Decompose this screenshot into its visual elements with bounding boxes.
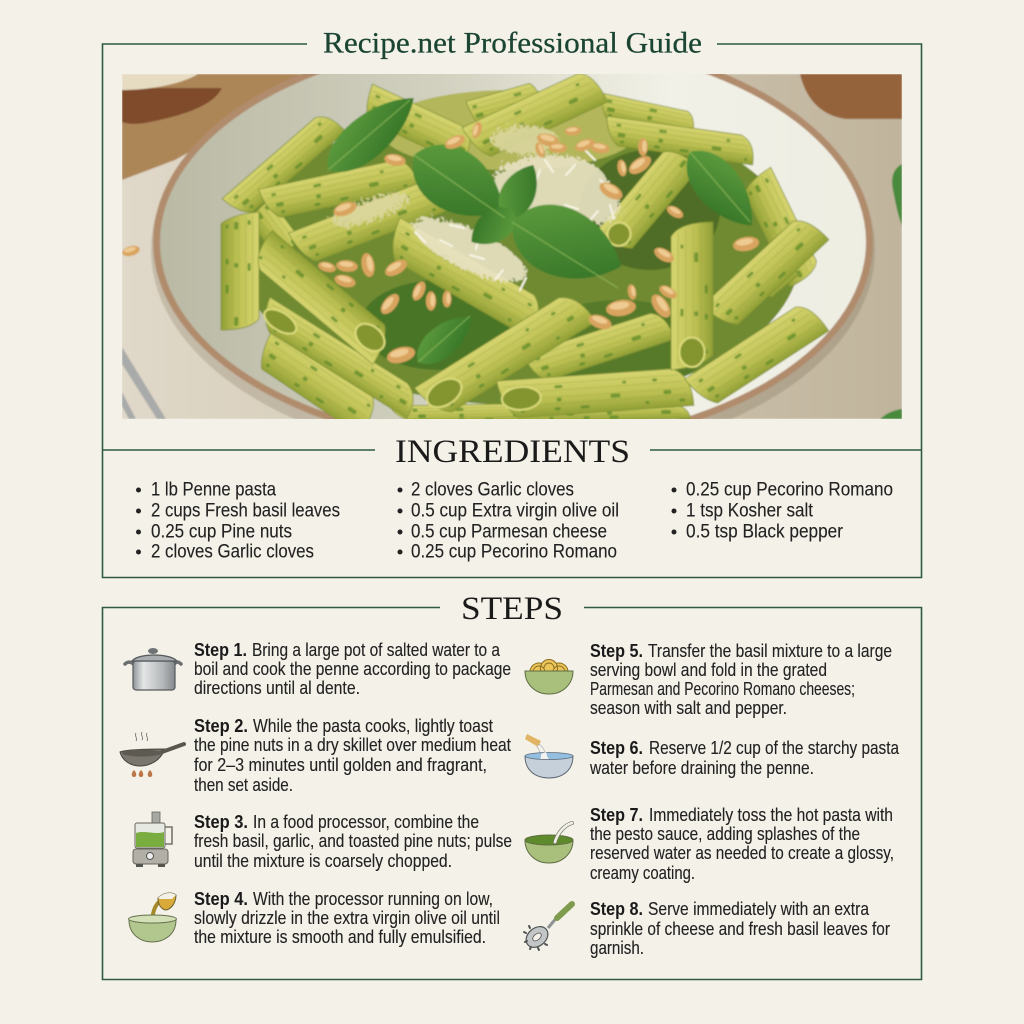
step 6: Reserve 1/2 cup of the starchy pasta: [649, 738, 900, 758]
step 1: Step 1.: [194, 639, 247, 660]
ingredients column 1: [136, 478, 340, 562]
step 3: In a food processor, combine the: [253, 812, 479, 832]
step 5: season with salt and pepper.: [590, 698, 787, 718]
bowl: [150, 74, 875, 419]
ingredients column 1: 0.25 cup Pine nuts: [151, 520, 292, 542]
step 5: [590, 640, 892, 718]
ingredients column 1: 2 cups Fresh basil leaves: [151, 500, 340, 522]
step 4: With the processor running on low,: [253, 889, 493, 909]
step 2: then set aside.: [194, 775, 293, 795]
ingredients column 2: [398, 478, 619, 562]
stray pine nut: [122, 245, 140, 257]
ingredients column 3: 0.25 cup Pecorino Romano: [686, 478, 893, 500]
step 6: Step 6.: [590, 737, 643, 758]
pine nuts: [317, 121, 760, 366]
step 2: [194, 715, 511, 795]
icon: pesto bowl with spoon: [525, 823, 573, 863]
fork: [122, 347, 166, 419]
icon: food processor: [133, 812, 172, 867]
ingredients column 1: 2 cloves Garlic cloves: [151, 540, 314, 562]
ingredients column 3: 1 tsp Kosher salt: [686, 500, 814, 522]
wood tabletop: [122, 74, 301, 180]
ingredients column 2: 2 cloves Garlic cloves: [411, 478, 574, 500]
ingredients column 3: [672, 478, 893, 542]
step 1: directions until al dente.: [194, 678, 360, 698]
step 5: Step 5.: [590, 640, 643, 661]
icon: skillet with flames: [120, 732, 184, 777]
step 6: [589, 737, 900, 778]
step 7: [590, 804, 894, 883]
step 8: [590, 898, 890, 958]
step 7: creamy coating.: [590, 863, 695, 883]
step 1: boil and cook the penne according to package: [194, 659, 511, 679]
step 1: [194, 639, 511, 698]
penne pieces: [221, 67, 829, 435]
heading: ingredients: INGREDIENTS: [395, 434, 630, 470]
step 2: Step 2.: [194, 715, 248, 736]
step 4: Step 4.: [194, 888, 248, 909]
ingredients column 2: 0.5 cup Extra virgin olive oil: [411, 500, 619, 522]
step 8: garnish.: [590, 938, 644, 958]
step 2: While the pasta cooks, lightly toast: [253, 716, 493, 736]
step 2: for 2–3 minutes until golden and fragrant,: [194, 755, 487, 775]
step 5: serving bowl and fold in the grated: [590, 660, 827, 680]
step 7: reserved water as needed to create a glossy,: [590, 843, 894, 863]
step 3: until the mixture is coarsely chopped.: [194, 851, 452, 871]
ingredients column 3: 0.5 tsp Black pepper: [686, 520, 843, 542]
pesto base: [240, 90, 800, 405]
step 7: Step 7.: [590, 804, 643, 825]
panel: steps frame: [102, 608, 922, 980]
table background: [122, 74, 902, 419]
step 1: Bring a large pot of salted water to a: [252, 640, 501, 660]
step 5: Transfer the basil mixture to a large: [648, 641, 892, 661]
ingredients column 2: 0.5 cup Parmesan cheese: [411, 520, 607, 542]
step 4: slowly drizzle in the extra virgin olive oil until: [194, 908, 500, 928]
photo: pesto penne in a bowl: [122, 74, 902, 419]
step 8: Serve immediately with an extra: [648, 899, 870, 919]
ingredients column 1: 1 lb Penne pasta: [151, 478, 276, 500]
step 3: fresh basil, garlic, and toasted pine nuts; pulse: [194, 831, 512, 851]
step 4: the mixture is smooth and fully emulsified.: [194, 927, 486, 947]
basil leaves: [327, 97, 752, 364]
icon: pasta server spoon: [522, 904, 572, 952]
icon: noodle bowl: [525, 660, 573, 694]
title: Recipe.net Professional Guide: [323, 26, 702, 60]
ingredients list: [136, 478, 893, 562]
step 8: Step 8.: [590, 898, 643, 919]
step 8: sprinkle of cheese and fresh basil leaves for: [590, 919, 890, 939]
wooden dish with cheese: [122, 74, 222, 124]
step 4: [194, 888, 500, 947]
ingredients column 2: 0.25 cup Pecorino Romano: [411, 540, 617, 562]
step 7: the pesto sauce, adding splashes of the: [590, 824, 860, 844]
step 5: Parmesan and Pecorino Romano cheeses;: [590, 679, 855, 699]
stray basil leaf: [880, 164, 902, 419]
icon: cooking pot: [125, 648, 181, 690]
heading: steps: STEPS: [461, 591, 563, 627]
panel: recipe frame: [102, 44, 922, 578]
icon: bowl with oil drizzle: [128, 893, 176, 942]
step 6: water before draining the penne.: [589, 758, 814, 778]
icon: bowl of pasta water: [525, 734, 573, 778]
step 7: Immediately toss the hot pasta with: [649, 805, 893, 825]
step 3: Step 3.: [194, 811, 248, 832]
step 3: [194, 811, 512, 871]
wooden container: [800, 74, 902, 119]
grated cheese: [329, 126, 620, 294]
step 2: the pine nuts in a dry skillet over medium heat: [194, 735, 511, 755]
